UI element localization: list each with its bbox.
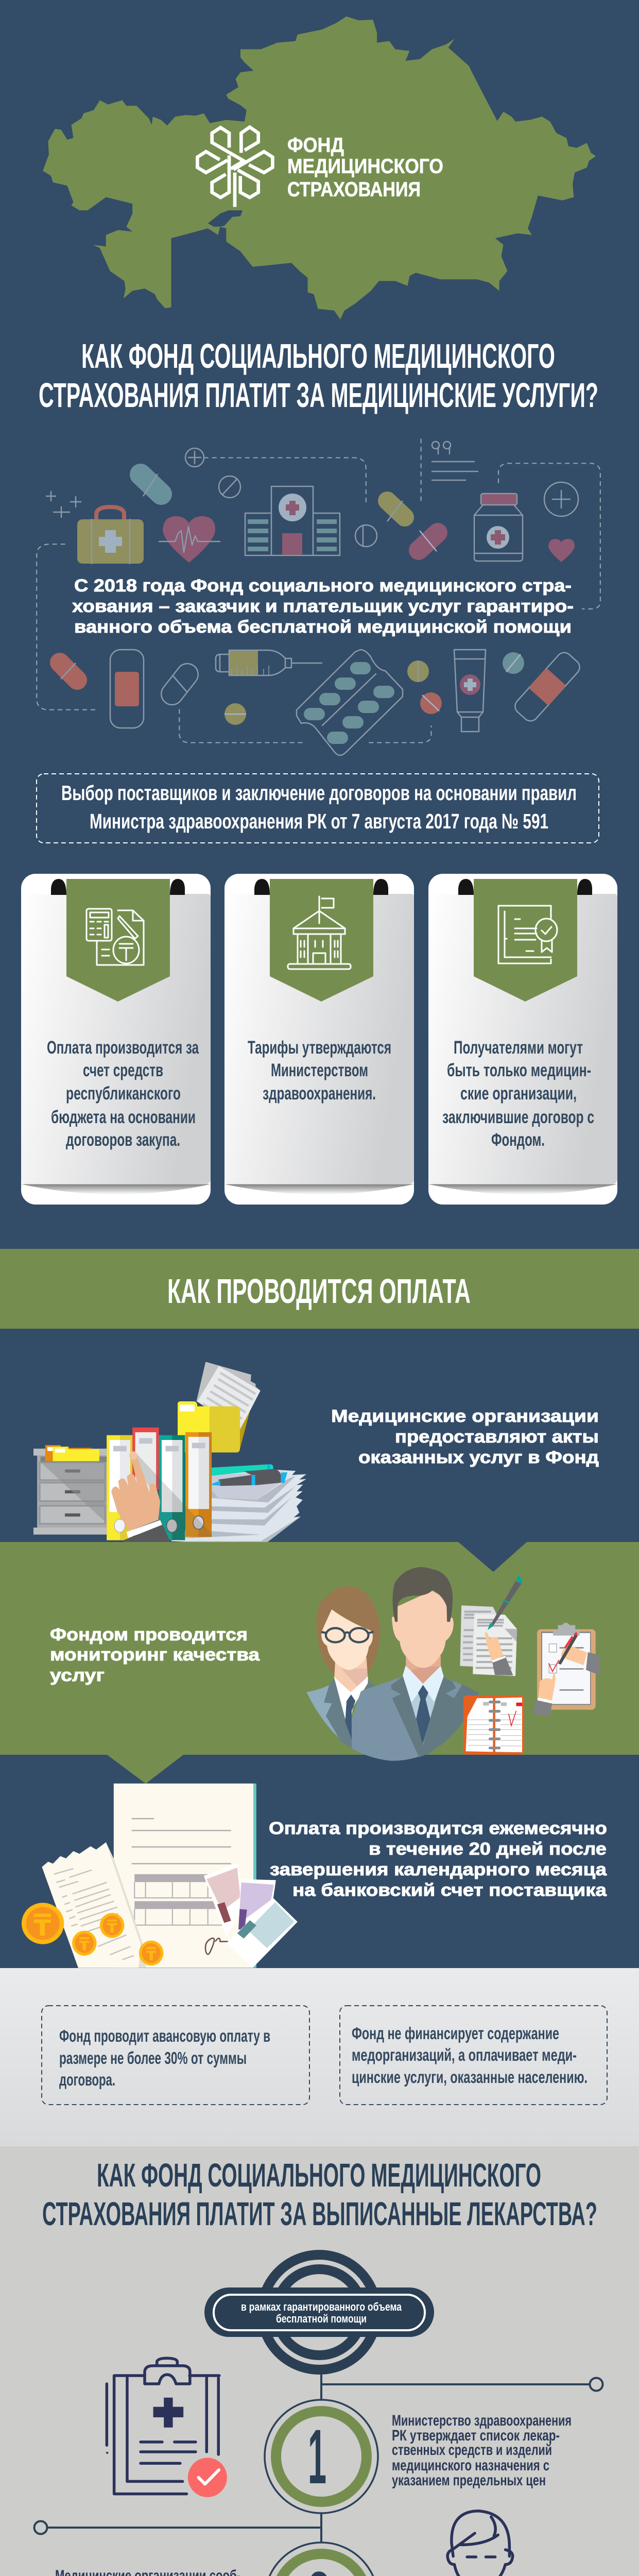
filing cabinet [33,1449,107,1455]
icon: olive capsule [387,501,405,521]
table [134,1874,224,1909]
man hair [392,1567,453,1622]
red binder [132,1428,159,1489]
card text: договоров закупа. [66,1130,180,1150]
note: advance payment: договора. [59,2070,115,2089]
card text: Оплата производится за [47,1038,199,1058]
ribbon folds [458,879,592,895]
note: no funding of organisation upkeep: Фонд не финансирует содержание [352,2024,559,2043]
logo: fund emblem header [197,127,443,207]
note: advance payment: размере не более 30% от суммы [59,2048,247,2067]
icon: blister pack [297,650,403,755]
logo wordmark: МЕДИЦИНСКОГО [287,155,443,178]
man neck and shirt [406,1656,441,1684]
text: monthly payment: в течение 20 дней после [369,1839,607,1859]
icon: salmon capsule [60,663,77,680]
badge: within guaranteed volume: в рамках гарантированного объема [241,2300,402,2313]
clipboard hands and pen [561,1644,587,1665]
card text: Тарифы утверждаются [248,1038,391,1058]
woman glasses [321,1628,373,1642]
back papers [196,1362,261,1429]
card text: Министерством [271,1060,368,1080]
text: monitoring: услуг [50,1666,105,1685]
note: no funding of organisation upkeep [340,2006,607,2105]
card text: бюджета на основании [51,1107,196,1127]
medical icons cluster [37,438,600,755]
ribbon folds [254,879,388,895]
intro paragraph: С 2018 года Фонд социального медицинского стра- [74,576,572,596]
icon: medical bag [77,507,144,564]
woman face [321,1609,373,1670]
icon: medicine bottle [474,494,523,561]
card text: Получателями могут [454,1038,583,1058]
text: medical organisations submit acts [331,1406,599,1467]
diagonal shadow [130,1455,212,1540]
icon: syringe [216,650,322,675]
ribbon [270,879,373,1002]
note: advance payment [42,2006,309,2105]
step 1 text: ственных средств и изделий [392,2442,552,2459]
intro paragraph: ванного объема бесплатной медицинской помощи [74,617,572,637]
receipt [42,1842,146,1968]
icon: ointment tube [454,650,486,732]
ribbon [66,879,170,1002]
card text [47,1038,199,1150]
yellow binder [107,1435,132,1540]
man suit [352,1676,479,1761]
text: medical organisations submit acts: предоставляют акты [395,1427,599,1447]
section band: how payment works [0,1249,639,1329]
intro paragraph [72,576,574,637]
icon: mauve capsule [419,531,438,551]
panel: grey drug payment section [0,2146,639,2576]
heading: prescribed medicines [42,2157,597,2232]
logo wordmark: ФОНД [287,134,344,157]
illustration: binders and documents [33,1362,306,1556]
logo wordmark: СТРАХОВАНИЯ [287,178,421,201]
step 1 text: РК утверждает список лекар- [392,2427,560,2444]
icon: heart with pulse [159,516,220,563]
small folders on top [45,1445,92,1461]
section: quality monitoring green band [0,1542,639,1784]
woman blazer [306,1685,352,1749]
panel: card 3 recipients [428,874,617,1205]
icon: teal capsule [141,474,161,496]
card text: ские организации, [460,1083,577,1104]
badge: within guaranteed volume: бесплатной помощи [276,2312,367,2325]
icon: hospital building [245,486,340,555]
text: monthly payment: завершения календарного месяца [270,1860,607,1879]
woman neck [334,1657,368,1693]
card text: Фондом. [491,1130,545,1150]
text: medical organisations submit acts: Медицинские организации [331,1406,599,1426]
illustration: specialists with documents [306,1567,600,1761]
card text: счет средств [83,1060,163,1080]
icon: large plus circle [544,482,578,516]
step 1 number [265,2400,378,2513]
woman hair [317,1586,380,1675]
teal binder [159,1435,185,1540]
step 1 number: 1 [308,2413,326,2500]
step 2 number [265,2543,378,2576]
pile of paper [170,1469,306,1546]
suit cuff and sleeve [127,1520,163,1538]
icon: small heart [548,539,575,562]
card text: здравоохранения. [263,1083,376,1104]
orange binder [185,1432,212,1537]
icon: round pills [407,652,524,714]
icon: olive pill [224,703,246,725]
icon: small outlined circles [185,448,377,547]
icon: vertical bandage [110,650,144,728]
step 1 text [392,2412,572,2489]
illustration: invoice, receipt, coins, photos [22,1784,298,1968]
man head [392,1590,454,1668]
title [39,337,598,415]
notebook [463,1696,524,1755]
badge: within guaranteed volume [204,2255,434,2370]
rule callout: dashed box [37,774,599,843]
photo cards [204,1862,245,1937]
section band: how payment works: КАК ПРОВОДИТСЯ ОПЛАТА [167,1272,471,1311]
text: monthly payment [269,1819,607,1900]
dashed connector lines [37,438,600,742]
background: navy top section [0,0,639,1968]
coins [22,1903,163,1965]
note: advance payment: Фонд проводит авансовую оплату в [59,2026,270,2045]
card text [248,1038,391,1104]
logo wordmark [287,134,443,201]
pen over documents [460,1605,517,1676]
pens [211,1464,273,1476]
icon: certificate [498,906,557,963]
map of Kazakhstan [43,16,596,319]
icon: doctor [432,2511,528,2576]
timeline connectors [34,2370,614,2576]
card text [442,1038,594,1150]
icon: calculator and invoice [87,909,144,965]
step 1 text: указанием предельных цен [392,2472,546,2489]
text: monitoring [50,1625,260,1685]
icon: clipboard with check [106,2358,227,2497]
icon: government building [288,896,351,969]
ribbon folds [51,879,185,895]
text: monitoring: Фондом проводится [50,1625,248,1645]
panel: card 2 tariffs [224,874,414,1205]
yellow folder [233,1412,250,1450]
signature [205,1938,228,1954]
icon: diagonal bandage [512,650,583,724]
clipboard [537,1629,596,1710]
text: medical organisations submit acts: оказанных услуг в Фонд [358,1448,599,1467]
icon: outlined capsule [157,659,202,709]
hand [111,1452,160,1531]
panel: card 1 budget [21,874,211,1205]
ribbon [474,879,577,1002]
panel: notes on light background [0,1968,639,2146]
step 1 text: медицинского назначения с [392,2457,549,2474]
step 1 text: Министерство здравоохранения [392,2412,572,2429]
icon: document lines [432,442,478,480]
text: monitoring: мониторинг качества [50,1645,260,1665]
text: monthly payment: Оплата производится ежемесячно [269,1819,607,1838]
text: monthly payment: на банковский счет поставщика [292,1880,607,1900]
intro paragraph: хования – заказчик и плательщик услуг гарантиро- [72,597,574,616]
card text: республиканского [66,1083,181,1104]
large document [114,1784,253,1968]
icon: plus marks [46,492,81,517]
